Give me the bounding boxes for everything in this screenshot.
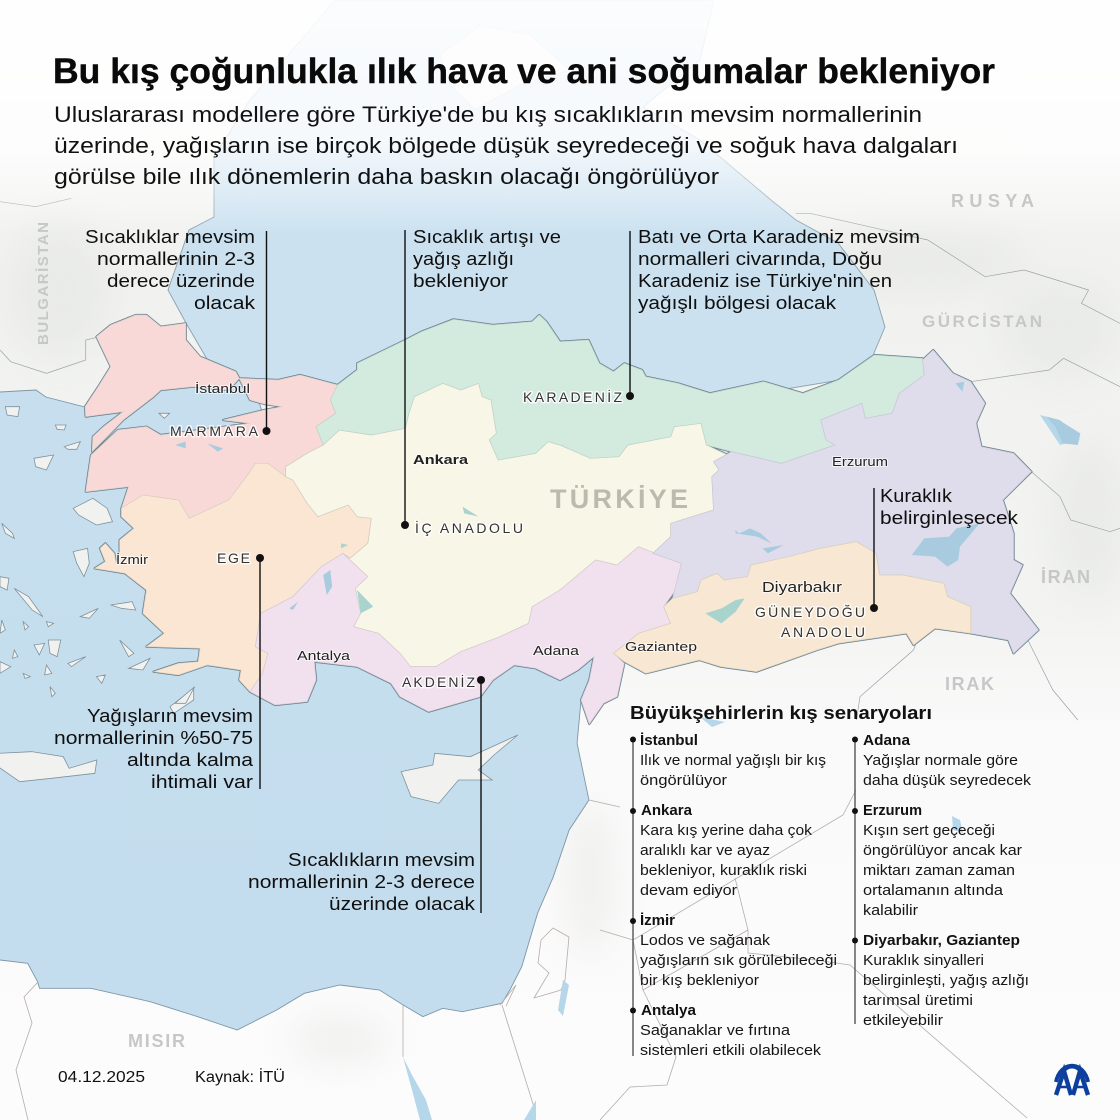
city labels (116, 381, 888, 663)
city: Erzurum: miktarı zaman zaman (863, 862, 1015, 879)
subtitle: üzerinde, yağışların ise birçok bölgede düşük seyredeceği ve soğuk hava dalgaları (54, 133, 958, 158)
city: Diyarbakır, Gaziantep (863, 932, 1029, 1029)
reservoirs (341, 507, 745, 623)
city: İstanbul: Ilık ve normal yağışlı bir kış (640, 752, 826, 769)
city: Ankara: Kara kış yerine daha çok (640, 822, 813, 839)
city: Antalya: Antalya (641, 1002, 697, 1019)
city: Erzurum: Kışın sert geçeceği (863, 822, 995, 839)
callout: Güneydoğu (870, 486, 1019, 612)
city: İzmir: Lodos ve sağanak (640, 932, 771, 949)
callout: İç Anadolu: yağış azlığı (413, 249, 514, 269)
city: İstanbul (640, 732, 826, 789)
city: Antalya: Sağanaklar ve fırtına (640, 1022, 791, 1039)
city: Diyarbakır, Gaziantep: belirginleşti, yağış azlığı (863, 972, 1029, 989)
city labels: Diyarbakır (762, 580, 842, 596)
region: Karadeniz (316, 315, 924, 463)
city labels: İzmir (116, 552, 149, 567)
country labels: MISIR (128, 1031, 185, 1051)
country labels: İRAN (1041, 567, 1090, 587)
terrain shading (10, 220, 1120, 1065)
region: Ege (95, 463, 371, 692)
water bodies outside Türkiye (403, 415, 1080, 1120)
country labels: IRAK (945, 674, 994, 694)
city: Diyarbakır, Gaziantep: tarımsal üretimi (863, 992, 973, 1009)
city: Antalya: sistemleri etkili olabilecek (640, 1042, 822, 1059)
land borders south (16, 790, 1027, 1120)
city labels: Adana (533, 643, 580, 658)
region: Doğu Anadolu (653, 350, 1039, 653)
city: Adana: daha düşük seyredecek (863, 772, 1032, 789)
callout: Akdeniz: üzerinde olacak (329, 894, 476, 914)
region labels: KARADENİZ (523, 388, 622, 405)
city: İzmir (640, 912, 837, 989)
region labels: ANADOLU (781, 624, 865, 640)
callout: Karadeniz: normalleri civarında, Doğu (638, 249, 882, 269)
city: İstanbul: öngörülüyor (640, 772, 727, 789)
icon: AA logo (1056, 1066, 1088, 1095)
city: Erzurum: ortalamanın altında (863, 882, 1004, 899)
callout: İç Anadolu: Sıcaklık artışı ve (413, 227, 561, 247)
islands (0, 407, 518, 803)
callout: İç Anadolu: bekleniyor (413, 271, 508, 291)
subtitle: Uluslararası modellere göre Türkiye'de bu kış sıcaklıkların mevsim normallerinin (54, 102, 922, 127)
city: Erzurum (863, 802, 1022, 919)
callout: Marmara: olacak (194, 293, 256, 313)
city: Adana: Adana (863, 732, 911, 749)
subtitle: görülse bile ılık dönemlerin daha baskın olacağı öngörülüyor (54, 164, 720, 189)
callout: Ege: ihtimali var (151, 772, 253, 792)
region labels: EGE (217, 550, 250, 566)
city labels: Ankara (413, 452, 469, 467)
callout: Marmara: Sıcaklıklar mevsim (85, 227, 255, 247)
region: Akdeniz (250, 547, 681, 724)
callout: Akdeniz: Sıcaklıkların mevsim (288, 850, 475, 870)
region: Güneydoğu Anadolu (614, 542, 971, 673)
timeline right (854, 740, 856, 1024)
region: İç Anadolu (286, 383, 731, 667)
city: İzmir: yağışların sık görülebileceği (640, 952, 837, 969)
city: Ankara: devam ediyor (640, 882, 737, 899)
country labels (35, 191, 1090, 1051)
coastline outline (85, 315, 1039, 724)
callout: Marmara: normallerinin 2-3 (97, 249, 255, 269)
callout: Güneydoğu: Kuraklık (880, 486, 953, 506)
title: Bu kış çoğunlukla ılık hava ve ani soğumalar bekleniyor (53, 52, 995, 91)
callout: Akdeniz: normallerinin 2-3 derece (248, 872, 475, 892)
city: Erzurum: öngörülüyor ancak kar (863, 842, 1022, 859)
city: İzmir: İzmir (640, 912, 675, 929)
region labels: İÇ ANADOLU (415, 519, 523, 536)
callout: Marmara (85, 227, 270, 435)
city: Diyarbakır, Gaziantep: Diyarbakır, Gaziantep (863, 932, 1020, 949)
top white fade (0, 0, 1120, 235)
subtitle (54, 102, 958, 189)
city labels: İstanbul (195, 381, 250, 396)
timeline dots (630, 736, 858, 1014)
callout: Ege: Yağışların mevsim (87, 706, 253, 726)
city: Diyarbakır, Gaziantep: etkileyebilir (863, 1012, 943, 1029)
region labels: GÜNEYDOĞU (755, 603, 865, 620)
lakes (175, 382, 1080, 610)
city labels: Gaziantep (625, 639, 697, 654)
region labels: MARMARA (170, 423, 259, 439)
panel heading: Büyükşehirlerin kış senaryoları (630, 702, 932, 723)
city: Ankara: aralıklı kar ve ayaz (640, 842, 770, 859)
Türkiye map with regions (85, 315, 1080, 724)
callout: Akdeniz (248, 676, 485, 914)
callout: Ege: altında kalma (127, 750, 254, 770)
region labels: AKDENİZ (402, 673, 475, 690)
city: Ankara: bekleniyor, kuraklık riski (640, 862, 807, 879)
land: Crimea (440, 25, 570, 110)
callout: Karadeniz (626, 227, 920, 400)
city: Diyarbakır, Gaziantep: Kuraklık sinyalleri (863, 952, 984, 969)
region: Marmara (85, 315, 337, 518)
callout: Ege (54, 554, 264, 792)
sea: Black Sea (168, 0, 885, 420)
timeline left (632, 740, 634, 1056)
callout: Ege: normallerinin %50-75 (54, 728, 253, 748)
city: Adana (863, 732, 1032, 789)
city: Ankara: Ankara (641, 802, 693, 819)
city: İzmir: bir kış bekleniyor (640, 972, 759, 989)
land borders (0, 198, 1120, 720)
callout: Güneydoğu: belirginleşecek (880, 508, 1019, 528)
callout: Karadeniz: yağışlı bölgesi olacak (638, 293, 837, 313)
source: Kaynak: İTÜ (195, 1068, 285, 1086)
city labels: Erzurum (832, 454, 888, 469)
callout: Karadeniz: Batı ve Orta Karadeniz mevsim (638, 227, 920, 247)
sea: Mediterranean and Aegean (0, 383, 597, 1030)
city: İstanbul: İstanbul (640, 732, 698, 749)
country labels: GÜRCİSTAN (922, 312, 1042, 331)
panel: Büyükşehirlerin kış senaryoları (630, 702, 1032, 1059)
city: Erzurum: Erzurum (863, 802, 922, 819)
city: Adana: Yağışlar normale göre (863, 752, 1018, 769)
callout: Marmara: derece üzerinde (107, 271, 255, 291)
callout: İç Anadolu (401, 227, 561, 529)
region labels (170, 388, 865, 690)
city: Ankara (640, 802, 813, 899)
country labels: BULGARİSTAN (35, 222, 52, 345)
country labels: RUSYA (951, 191, 1034, 211)
city: Erzurum: kalabilir (863, 902, 918, 919)
date: 04.12.2025 (58, 1069, 145, 1086)
callout: Karadeniz: Karadeniz ise Türkiye'nin en (638, 271, 892, 291)
city: Antalya (640, 1002, 822, 1059)
label: TÜRKİYE: TÜRKİYE (550, 484, 688, 514)
city labels: Antalya (297, 648, 351, 663)
